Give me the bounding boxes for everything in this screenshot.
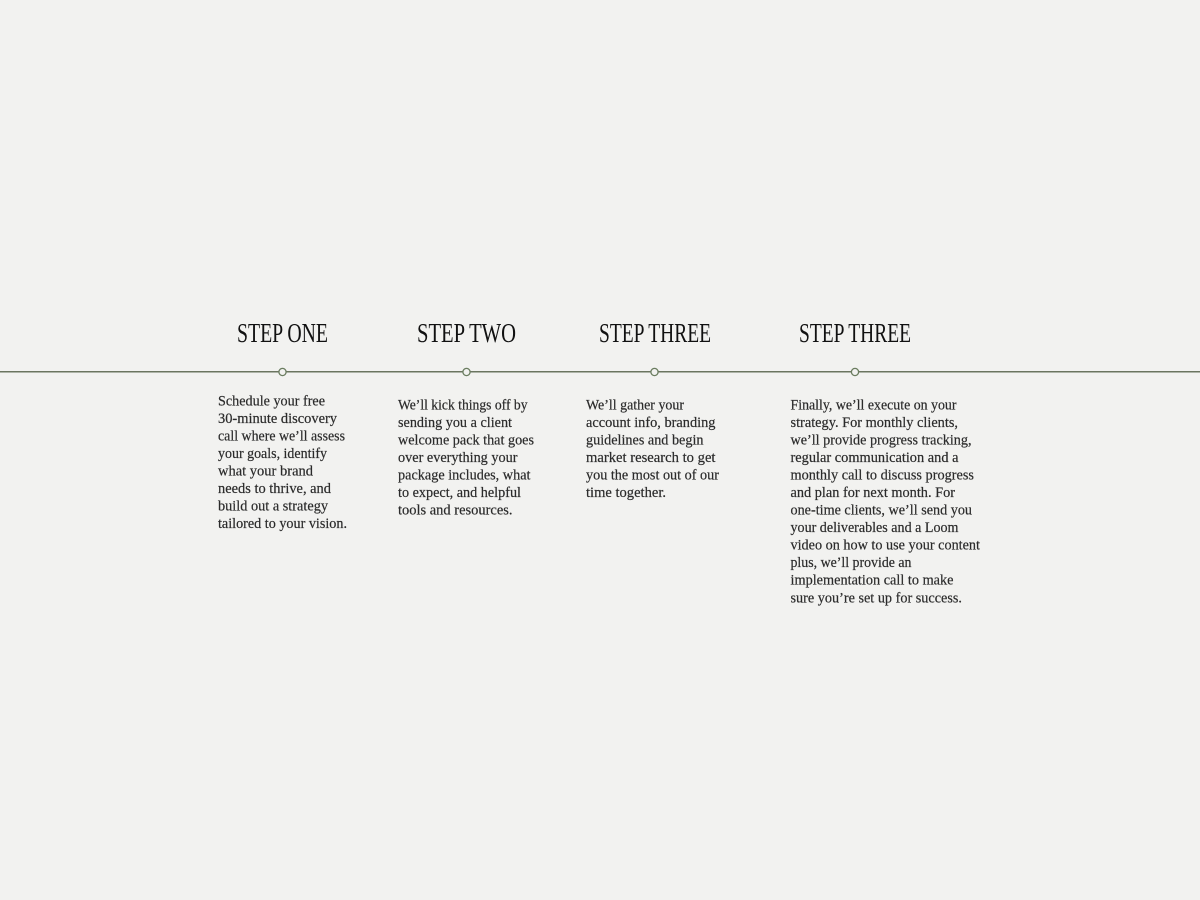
text block: step three description: [586, 398, 719, 501]
text block: step two description: tools and resources.: [398, 502, 512, 518]
text block: final step description: your deliverables and a Loom: [790, 520, 959, 536]
text block: step two description: package includes, what: [398, 468, 530, 484]
heading: step three: STEP THREE: [599, 318, 711, 348]
text block: final step description: we’ll provide progress tracking,: [790, 432, 972, 448]
heading: fourth step, labelled step three: STEP THREE: [799, 318, 911, 348]
text block: final step description: one-time clients, we’ll send you: [790, 502, 972, 518]
text block: step one description: tailored to your vision.: [218, 516, 347, 532]
text block: step one description: your goals, identify: [218, 446, 328, 462]
text block: step three description: guidelines and begin: [586, 432, 704, 448]
text block: step two description: [398, 398, 534, 518]
text block: final step description: sure you’re set up for success.: [790, 590, 962, 606]
text block: final step description: monthly call to discuss progress: [790, 468, 974, 484]
text block: final step description: strategy. For monthly clients,: [790, 415, 958, 431]
text block: step one description: build out a strategy: [218, 498, 329, 514]
text block: final step description: Finally, we’ll execute on your: [790, 398, 957, 414]
heading: step two: STEP TWO: [417, 318, 516, 348]
text block: step three description: market research to get: [586, 450, 716, 466]
text block: step three description: We’ll gather your: [586, 398, 684, 414]
text block: step two description: welcome pack that goes: [398, 432, 534, 448]
text block: final step description: video on how to use your content: [790, 538, 980, 554]
text block: step three description: you the most out of our: [586, 468, 719, 484]
timeline: [0, 368, 1200, 376]
text block: step two description: over everything your: [398, 450, 518, 466]
heading: step one: STEP ONE: [237, 318, 328, 348]
text block: step one description: needs to thrive, and: [218, 481, 332, 497]
text block: step one description: what your brand: [218, 464, 314, 480]
text block: step one description: Schedule your free: [218, 394, 325, 410]
text block: step one description: 30-minute discovery: [218, 411, 338, 427]
text block: step two description: We’ll kick things off by: [398, 398, 528, 414]
text block: final step description: implementation call to make: [790, 572, 954, 588]
text block: step three description: time together.: [586, 485, 666, 501]
text block: step three description: account info, branding: [586, 415, 716, 431]
text block: step two description: sending you a client: [398, 415, 512, 431]
text block: final step description: [790, 398, 980, 606]
text block: step one description: call where we’ll assess: [218, 428, 345, 444]
text block: final step description: and plan for next month. For: [790, 485, 955, 501]
text block: final step description: regular communication and a: [790, 450, 959, 466]
text block: step one description: [218, 394, 347, 532]
text block: final step description: plus, we’ll provide an: [790, 555, 912, 571]
text block: step two description: to expect, and helpful: [398, 485, 521, 501]
